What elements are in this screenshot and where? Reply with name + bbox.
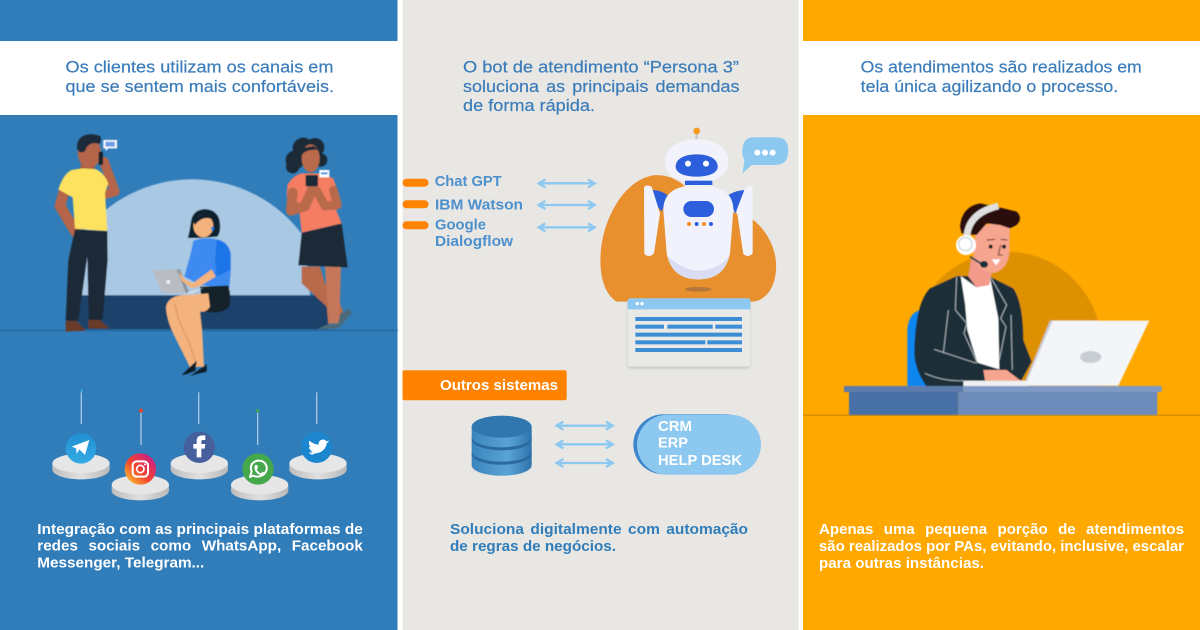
body text: integração: Messenger, Telegram... — [37, 556, 204, 572]
twitter — [289, 392, 347, 479]
panel: bot (grey) — [402, 0, 798, 630]
desk — [844, 386, 1162, 415]
body text: integração — [37, 522, 364, 572]
list: AI engines: Chat GPT — [435, 173, 502, 190]
body text: automação: de regras de negócios. — [450, 539, 616, 555]
telegram — [52, 389, 110, 479]
whatsapp — [231, 409, 288, 500]
body text: PAs: são realizados por PAs, evitando, inclusive, escalar — [819, 539, 1184, 555]
panel: canais (blue) — [0, 0, 398, 630]
laptop — [963, 321, 1149, 386]
header band: atendimento: Os atendimentos são realizados em — [861, 58, 1142, 76]
body text: automação: Soluciona digitalmente com automação — [450, 522, 748, 538]
heading: bot: O bot de atendimento “Persona 3” — [463, 57, 739, 76]
heading: bot — [463, 57, 740, 115]
dome and bench — [0, 179, 398, 331]
social network platforms — [52, 389, 347, 500]
label: outros sistemas — [402, 370, 567, 400]
pill: CRM ERP Help Desk: HELP DESK — [658, 453, 743, 469]
list: AI engines — [402, 173, 523, 250]
arrows: engines to bot — [539, 179, 595, 231]
chat bubble — [742, 137, 788, 173]
body text: automação — [450, 522, 748, 555]
heading: bot: soluciona as principais demandas — [463, 77, 740, 96]
arrows: database to systems — [557, 422, 613, 467]
heading: bot: de forma rápida. — [463, 96, 595, 115]
body text: PAs: para outras instâncias. — [819, 556, 984, 572]
header band: canais: Os clientes utilizam os canais em — [66, 58, 334, 76]
list: AI engines: Dialogflow — [435, 233, 513, 250]
list: AI engines: Google — [435, 216, 486, 233]
label: outros sistemas: Outros sistemas — [440, 378, 558, 394]
body text: integração: Integração com as principais plataformas de — [37, 522, 363, 538]
instagram — [112, 409, 169, 500]
woman with smartphone — [286, 138, 352, 329]
list: AI engines: IBM Watson — [435, 196, 523, 213]
facebook — [171, 392, 228, 479]
illustration: agent at desk — [844, 203, 1162, 415]
pill: CRM ERP Help Desk: ERP — [658, 436, 688, 452]
body text: PAs — [819, 522, 1184, 572]
background circle — [912, 252, 1102, 387]
seated woman with laptop — [153, 209, 231, 376]
body text: PAs: Apenas uma pequena porção de atendimentos — [819, 522, 1184, 538]
panel: atendimento (orange) — [803, 0, 1200, 630]
header band: atendimento: tela única agilizando o processo. — [861, 77, 1118, 96]
body text: integração: redes sociais como WhatsApp, Facebook — [37, 539, 364, 555]
header band: atendimento — [803, 41, 1200, 115]
agent figure — [907, 203, 1032, 387]
man with phone — [58, 134, 117, 332]
pill: CRM ERP Help Desk — [633, 414, 761, 475]
browser window — [628, 298, 750, 368]
illustration: robot — [600, 128, 788, 368]
pill: CRM ERP Help Desk: CRM — [658, 419, 692, 435]
orange blob — [600, 175, 776, 302]
illustration: people using channels — [0, 134, 398, 376]
robot figure — [644, 128, 753, 292]
ground line — [803, 414, 1200, 416]
icon: database — [472, 416, 532, 476]
header band: canais: que se sentem mais confortáveis. — [66, 77, 334, 96]
header band: canais — [0, 41, 398, 115]
